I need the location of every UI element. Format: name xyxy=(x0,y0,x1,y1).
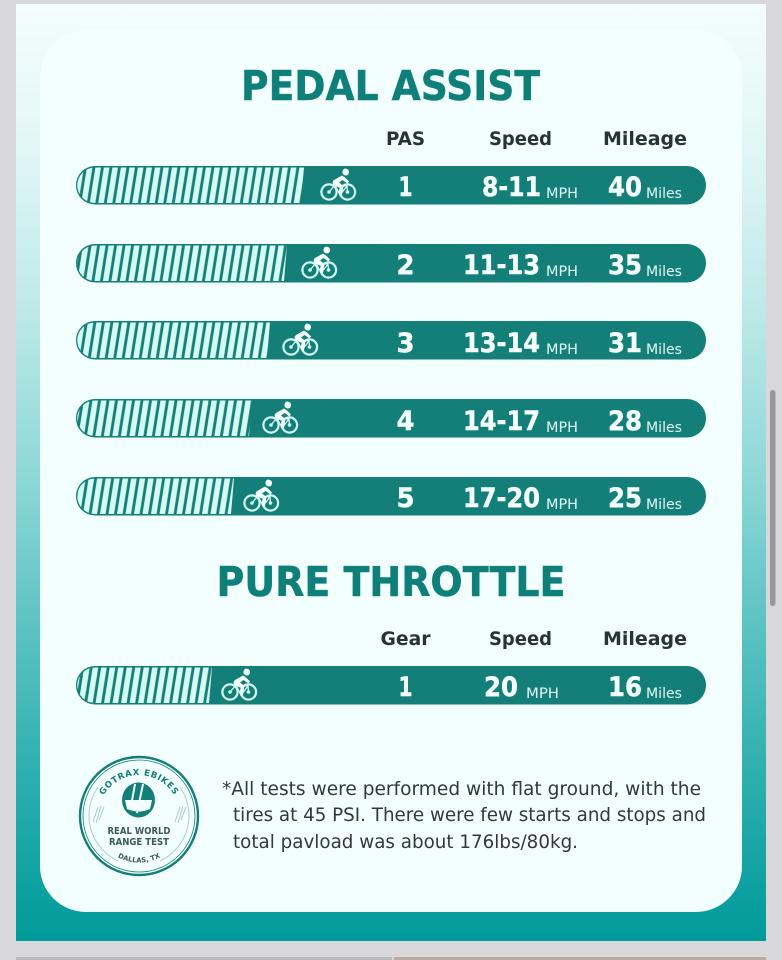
column headers: pure throttle xyxy=(380,628,687,650)
heading: pure throttle: PURE THROTTLE xyxy=(216,558,566,606)
row: PAS 5: Miles xyxy=(646,497,682,513)
footnote xyxy=(222,778,706,853)
row: PAS 3: 13-14 xyxy=(463,328,540,359)
footnote: *All tests were performed with flat ground, with the xyxy=(222,778,701,800)
footnote: tires at 45 PSI. There were few starts and stops and xyxy=(233,804,706,826)
scrollbar xyxy=(770,390,776,606)
row: PAS 2: Miles xyxy=(646,264,682,280)
row: PAS 2: 2 xyxy=(396,250,414,281)
row: PAS 3 xyxy=(76,321,706,360)
row: PAS 3: Miles xyxy=(646,342,682,358)
row: PAS 1: 8-11 xyxy=(482,172,541,203)
badge: real world range test: GOTRAX EBIKES xyxy=(100,768,178,794)
row: PAS 1: 40 xyxy=(608,172,642,203)
column headers: pure throttle: Mileage xyxy=(603,628,687,650)
row: PAS 1: Miles xyxy=(646,186,682,202)
row: gear 1: Miles xyxy=(646,686,682,702)
row: PAS 4: MPH xyxy=(546,420,578,436)
badge: real world range test: RANGE TEST xyxy=(109,837,169,848)
row: PAS 4: Miles xyxy=(646,420,682,436)
column headers: pedal assist xyxy=(386,128,687,150)
heading: pedal assist: PEDAL ASSIST xyxy=(241,62,540,110)
badge: real world range test: DALLAS, TX xyxy=(118,852,160,863)
row: PAS 5: MPH xyxy=(546,497,578,513)
row: PAS 4: 28 xyxy=(608,406,642,437)
row: gear 1: 16 xyxy=(608,672,642,703)
row: gear 1: 20 xyxy=(484,672,518,703)
row: gear 1 xyxy=(76,666,706,704)
row: PAS 5: 25 xyxy=(608,483,642,514)
row: PAS 2: 35 xyxy=(608,250,642,281)
column headers: pedal assist: Mileage xyxy=(603,128,687,150)
row: gear 1: MPH xyxy=(526,686,559,702)
row: PAS 1: 1 xyxy=(398,172,412,203)
column headers: pedal assist: PAS xyxy=(386,128,425,150)
row: PAS 4 xyxy=(76,399,706,438)
badge: real world range test xyxy=(78,756,200,876)
row: PAS 4: 14-17 xyxy=(463,406,540,437)
row: PAS 5: 17-20 xyxy=(463,483,540,514)
row: PAS 5: 5 xyxy=(396,483,414,514)
row: PAS 1 xyxy=(76,166,706,204)
row: PAS 3: 31 xyxy=(608,328,642,359)
row: PAS 2 xyxy=(76,244,706,282)
row: PAS 5 xyxy=(76,477,706,516)
column headers: pure throttle: Speed xyxy=(489,628,552,650)
row: PAS 2: MPH xyxy=(546,264,578,280)
row: gear 1: 1 xyxy=(398,672,412,703)
row: PAS 1: MPH xyxy=(546,186,578,202)
row: PAS 2: 11-13 xyxy=(463,250,540,281)
row: PAS 3: MPH xyxy=(546,342,578,358)
row: PAS 4: 4 xyxy=(396,406,414,437)
next post strip xyxy=(16,957,766,960)
column headers: pedal assist: Speed xyxy=(489,128,552,150)
row: PAS 3: 3 xyxy=(396,328,414,359)
footnote: total pavload was about 176lbs/80kg. xyxy=(233,831,578,853)
badge: real world range test: REAL WORLD xyxy=(108,826,171,837)
column headers: pure throttle: Gear xyxy=(380,628,431,650)
